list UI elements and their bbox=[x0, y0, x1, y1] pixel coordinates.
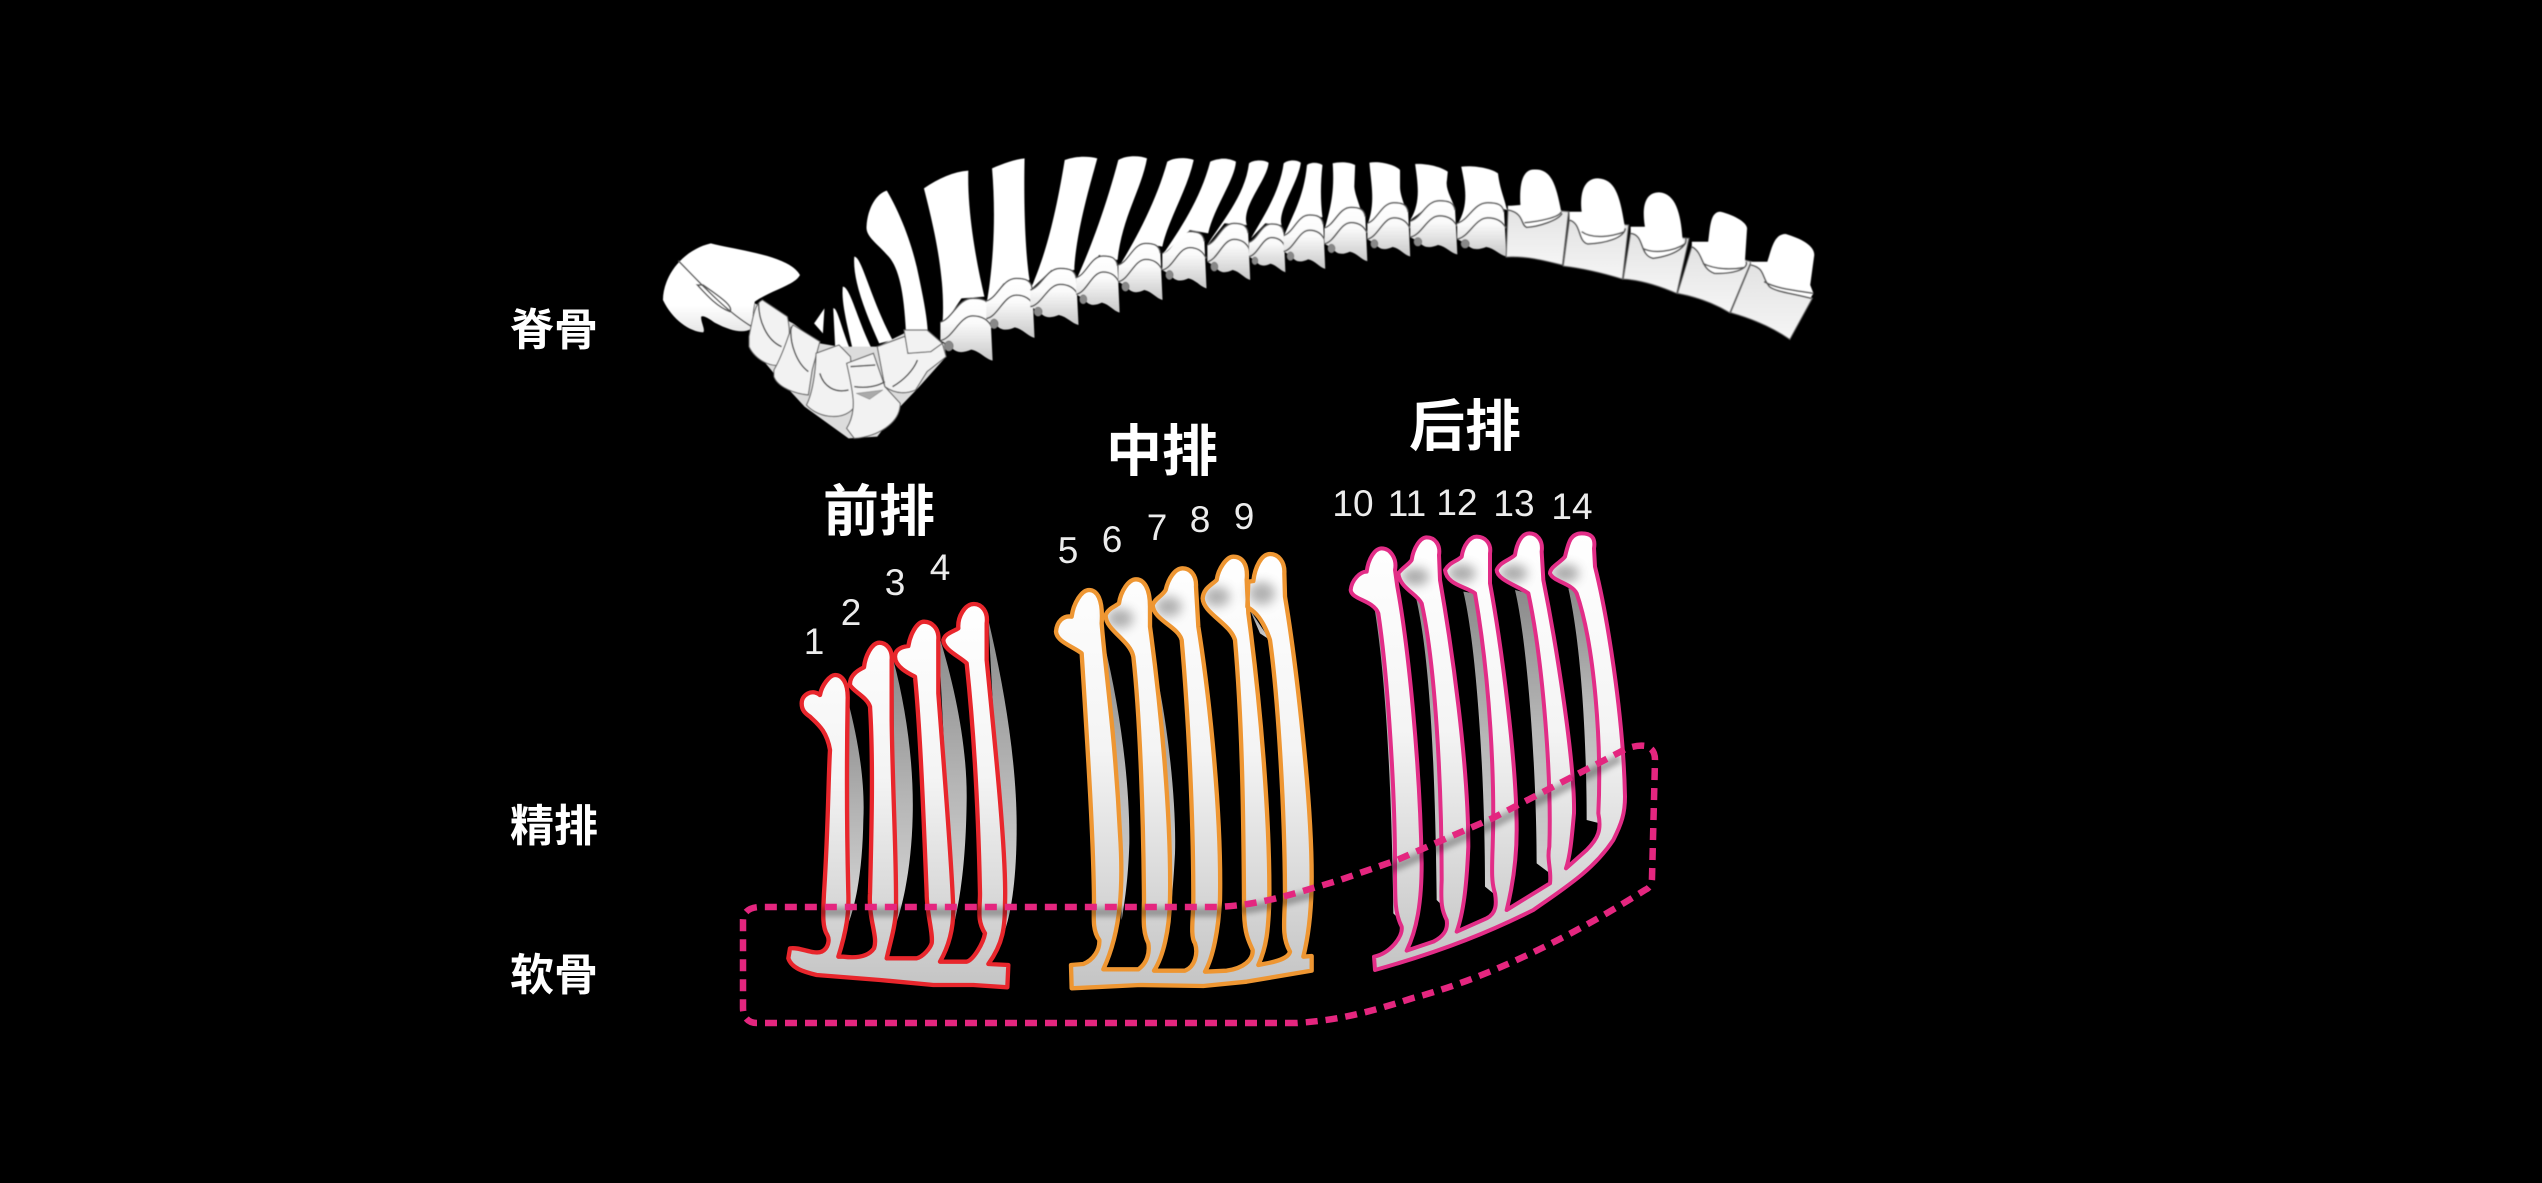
row label: cartilage: 软骨 bbox=[510, 951, 598, 1000]
rib back crescents bbox=[848, 620, 1017, 930]
ribs fill bbox=[1056, 554, 1312, 988]
rib numbers 1-14: 5 bbox=[1058, 530, 1078, 571]
heading: middle row: 中排 bbox=[1106, 420, 1218, 483]
ribs fill bbox=[1351, 533, 1625, 970]
rear spine section bbox=[1162, 159, 1814, 339]
thoracic vertebrae front bbox=[940, 232, 1207, 361]
neck and front spine section bbox=[663, 156, 1207, 438]
neural spines of neck bbox=[814, 171, 984, 357]
rib numbers 1-14: 8 bbox=[1190, 499, 1210, 540]
ribs outline bbox=[1056, 554, 1312, 988]
rib numbers 1-14: 1 bbox=[804, 621, 824, 662]
rib numbers 1-14: 9 bbox=[1234, 496, 1254, 537]
rib back crescents bbox=[1373, 588, 1600, 920]
rib numbers 1-14: 14 bbox=[1551, 486, 1593, 527]
group: front ribs 1-4 bbox=[788, 604, 1017, 987]
rib numbers 1-14: 11 bbox=[1388, 483, 1426, 524]
rib head shading bbox=[1401, 565, 1579, 585]
heading: front row: 前排 bbox=[823, 480, 935, 543]
lumbar processes bbox=[1508, 169, 1814, 298]
rib numbers 1-14: 4 bbox=[930, 547, 950, 588]
group: middle ribs 5-9 bbox=[1056, 554, 1312, 988]
rib back crescents bbox=[1103, 610, 1270, 923]
rib numbers 1-14: 10 bbox=[1332, 483, 1374, 524]
rib numbers 1-14: 12 bbox=[1436, 482, 1478, 523]
dashed line shadow bbox=[760, 758, 1620, 912]
thoracic spines rear bbox=[1162, 159, 1507, 255]
ribs outline bbox=[1351, 533, 1625, 970]
rib numbers 1-14 bbox=[804, 482, 1593, 662]
rib numbers 1-14: 6 bbox=[1102, 519, 1122, 560]
rib numbers 1-14: 7 bbox=[1147, 507, 1167, 548]
skull bone bbox=[663, 243, 800, 332]
cartilage dashed outline bbox=[743, 746, 1655, 1023]
rib numbers 1-14: 13 bbox=[1493, 483, 1535, 524]
rib head shading bbox=[1107, 582, 1275, 628]
neck vertebrae bbox=[749, 300, 946, 438]
ribs front outline bbox=[788, 604, 1008, 987]
rib numbers 1-14: 2 bbox=[841, 592, 861, 633]
lumbar vertebra bodies bbox=[1506, 206, 1812, 339]
thoracic vertebrae rear bbox=[1207, 201, 1506, 280]
group: rear ribs 10-14 bbox=[1351, 533, 1625, 970]
rib numbers 1-14: 3 bbox=[885, 562, 905, 603]
row label: rib: 精排 bbox=[510, 802, 598, 851]
thoracic spines front bbox=[986, 156, 1194, 305]
row label: spine: 脊骨 bbox=[510, 306, 598, 355]
heading: rear row: 后排 bbox=[1409, 395, 1521, 458]
spine illustration bbox=[663, 156, 1814, 438]
